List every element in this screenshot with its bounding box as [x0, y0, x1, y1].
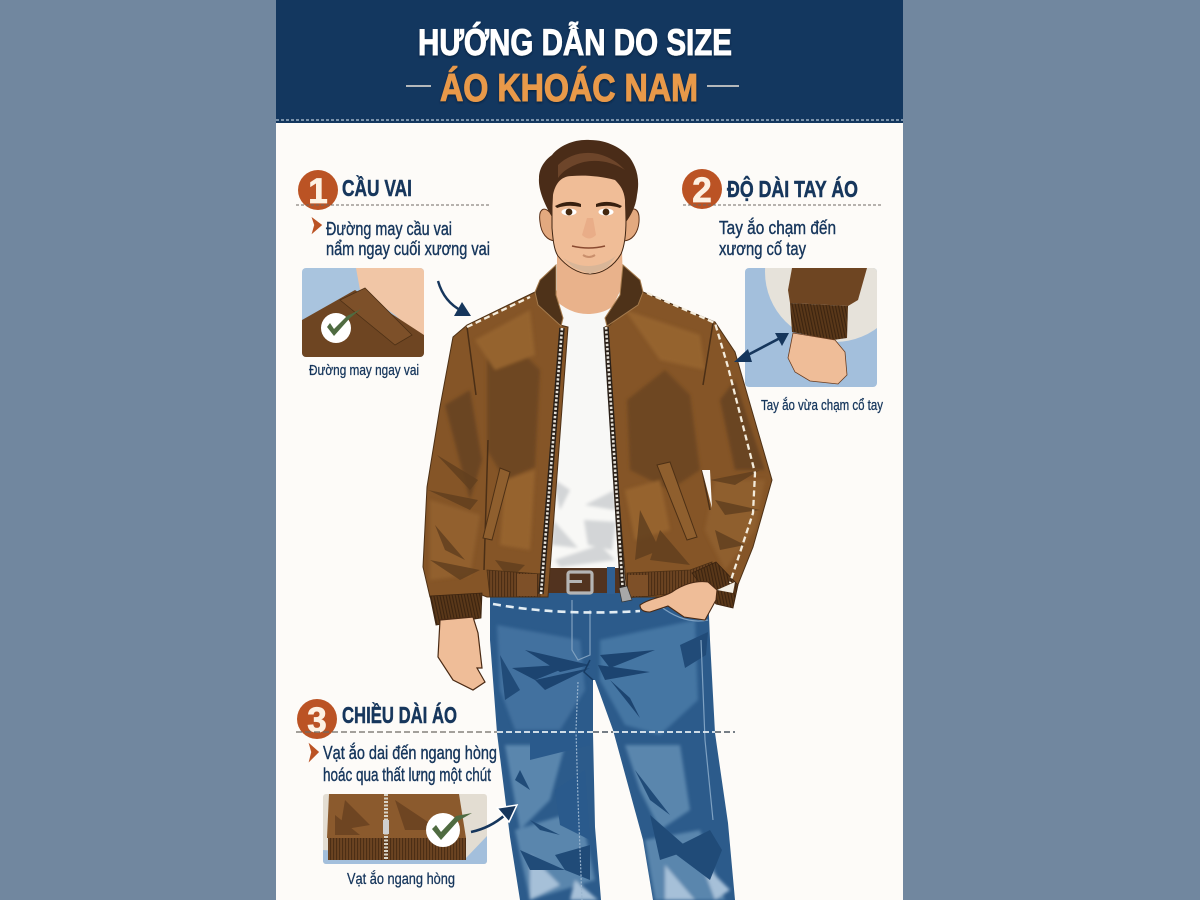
- heading 2: ĐỘ DÀI TAY ÁO: [727, 175, 858, 202]
- hem photo: [323, 794, 487, 864]
- body text 1: Đường may cầu vai: [326, 219, 452, 239]
- section 1: shoulder seam: [296, 170, 490, 379]
- body text 2: [719, 217, 836, 259]
- body text 2: Tay ắo chạm đến: [719, 217, 836, 238]
- stitched shoulder and sleeve line: [467, 293, 755, 583]
- caption 3: Vạt ắo ngang hòng: [347, 869, 455, 888]
- zipper pull: [619, 586, 632, 602]
- brows and eyes: [555, 202, 622, 216]
- check mark: [321, 309, 361, 343]
- right hand in pocket: [640, 582, 717, 620]
- pockets: [483, 462, 697, 540]
- caption 1: Đường may ngay vai: [309, 362, 419, 379]
- body text 1: [326, 219, 490, 259]
- body text 3: hoác qua thất lưng một chút: [323, 765, 491, 785]
- badge 1: [298, 170, 338, 211]
- hem dashed line: [493, 604, 640, 612]
- badge 2: 2: [692, 171, 712, 210]
- body text 1: nẩm ngay cuối xương vai: [326, 239, 490, 259]
- hem rib: [487, 570, 541, 597]
- check mark: [426, 813, 472, 847]
- hair: [539, 140, 638, 222]
- right cuff: [692, 562, 738, 608]
- badge 3: [297, 699, 337, 740]
- title line 1: HƯỚNG DẪN DO SIZE: [418, 21, 732, 63]
- left cuff: [430, 593, 482, 625]
- badge 1: 1: [308, 172, 328, 211]
- section 2: sleeve length: [682, 169, 905, 414]
- double arrow: [734, 333, 789, 362]
- brown belt and buckle: [548, 567, 623, 594]
- neck: [553, 250, 623, 314]
- badge 3: 3: [307, 701, 327, 740]
- sleeve arrowhead: [717, 582, 735, 593]
- left hand: [438, 617, 485, 690]
- jacket collar: [535, 265, 643, 326]
- chevron: [310, 745, 318, 760]
- wrist photo: [745, 268, 877, 387]
- body text 3: Vạt ắo dai đến ngang hòng: [323, 742, 497, 763]
- badge 2: [682, 169, 722, 210]
- chevron: [313, 219, 321, 232]
- head: [539, 140, 639, 274]
- header banner: [276, 0, 903, 123]
- section 3: jacket length: [296, 699, 735, 888]
- man figure: [423, 140, 772, 900]
- title line 2 with side rules: ÁO KHOÁC NAM: [440, 66, 698, 110]
- heading 3: CHIỀU DÀI ÁO: [342, 701, 457, 728]
- body text 2: xương cố tay: [719, 239, 806, 259]
- body text 3: [323, 742, 497, 785]
- bomber jacket: [423, 292, 772, 625]
- shoulder photo: [302, 268, 424, 357]
- jeans: [490, 592, 735, 900]
- white t-shirt: [551, 298, 617, 567]
- arrow to shoulder: [438, 281, 471, 316]
- heading 1: CẦU VAI: [342, 174, 412, 201]
- zippers: [541, 327, 623, 594]
- arrow to hem: [471, 805, 517, 832]
- poster panel: [276, 0, 903, 900]
- caption 2: Tay ắo vừa chạm cổ tay: [761, 397, 883, 414]
